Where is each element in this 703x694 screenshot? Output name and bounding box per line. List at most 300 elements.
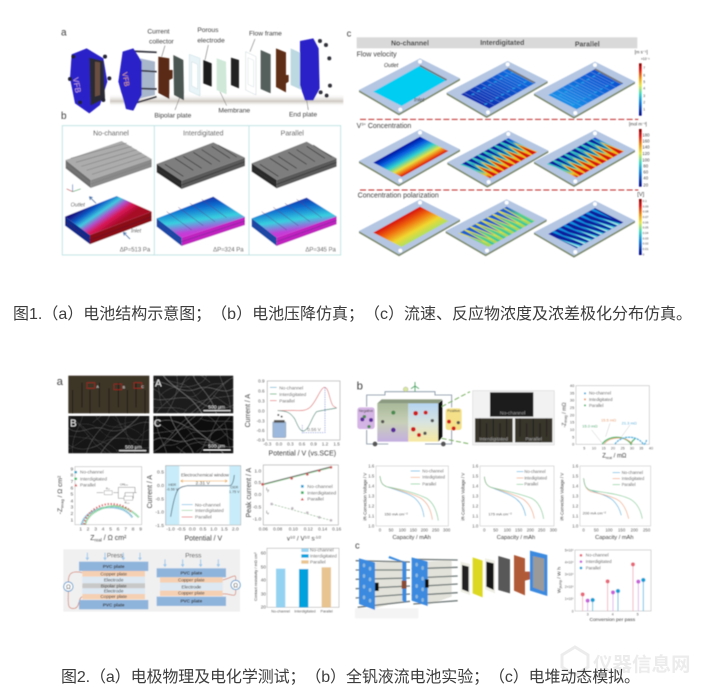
chart: discharge curves 150 mA cm-2: Intedigitated [422, 475, 446, 480]
part labels: Membrane [218, 107, 250, 114]
chart: pump work: 5 [637, 612, 639, 616]
icon: end plate with rods: VFB [120, 71, 132, 87]
chart: discharge curves 150 mA cm-2: 0 [379, 527, 382, 532]
map: flow no-channel: Inlet [414, 97, 425, 103]
icon: exploded stack parts [461, 551, 547, 597]
pressure drop values [120, 247, 337, 253]
panel b: all-vanadium flow battery tests: b [357, 380, 363, 392]
chart: contact resistivity bars: No-channel [271, 609, 290, 613]
axes triad [67, 184, 81, 192]
chart: discharge curves 175 mA cm-2 [460, 463, 558, 541]
chart: discharge curves 200 mA cm-2: 50 [594, 527, 599, 532]
chart: Nyquist full cell: real [606, 456, 612, 460]
chart: Nyquist plot: -Z [57, 508, 64, 514]
chart: electrochemical window: HER [168, 483, 177, 487]
micrograph A: A [155, 379, 162, 390]
chart: Nyquist full cell: 25 [621, 446, 625, 450]
chart: peak current: 0.08 [273, 527, 283, 532]
icon: bipolar plate [173, 55, 184, 100]
colorbar: polarization: 0 [643, 252, 645, 256]
chart: Nyquist plot: 1 [79, 527, 82, 533]
part labels: electrode [197, 37, 225, 44]
micrograph A: 500 μm [208, 404, 225, 410]
colorbar: polarization: [V] [637, 192, 645, 198]
colorbar: flow velocity [635, 49, 650, 116]
chart: discharge curves 175 mA cm-2: 1.2 [472, 503, 479, 508]
chart: Nyquist plot [57, 466, 142, 542]
chart: electrochemical window: Electrochemical window [181, 472, 230, 477]
chart: contact resistivity bars: Interdigitated [294, 609, 316, 613]
photo: electrode with marked regions [68, 376, 149, 413]
chart: electrochemical window: 0.0 [189, 527, 196, 533]
part labels: Porous [197, 27, 219, 34]
diagram: contact resistivity test stacks: Ω [233, 582, 238, 589]
chart: discharge curves 200 mA cm-2: 250 [643, 527, 651, 532]
chart: pump work: No-channel [586, 553, 609, 558]
chart: cyclic voltammetry: 0.56 V [307, 427, 322, 432]
chart: cyclic voltammetry: 0.3 [287, 441, 294, 446]
photo: electrode with marked regions: A [96, 385, 99, 389]
chart: discharge curves 200 mA cm-2: 150 [618, 527, 626, 532]
photo: electrode with marked regions: B [123, 386, 126, 390]
colorbar: polarization [637, 192, 649, 256]
chart: peak current: v [287, 536, 290, 543]
colorbar: concentration: 60 [643, 170, 649, 175]
chart: cyclic voltammetry: 0.0 [258, 408, 265, 413]
chart: Nyquist plot: 1 [71, 517, 74, 523]
chart: Nyquist full cell: -Z [562, 423, 568, 428]
chart: peak current: s [310, 536, 315, 543]
chart: peak current: 1.0 [254, 468, 262, 474]
chart: discharge curves 175 mA cm-2: Intedigitated [524, 475, 548, 480]
colorbar: concentration: 180 [642, 133, 650, 138]
column titles [93, 131, 304, 138]
chart: peak current: 0.5 [254, 480, 262, 486]
schematic: flow battery cell: Positive [447, 409, 460, 413]
row titles: Concentration polarization [358, 193, 439, 200]
chart: discharge curves 200 mA cm-2 [559, 463, 651, 541]
part labels: Flow frame [249, 31, 282, 38]
chart: discharge curves 150 mA cm-2: 1.6 [368, 463, 375, 468]
chart: pump work: Interdigitated [586, 559, 612, 564]
chart: discharge curves 175 mA cm-2: 1.6 [472, 463, 479, 468]
colorbar: flow velocity: 6 [643, 73, 645, 77]
chart: Nyquist plot: Z [90, 535, 95, 542]
figure 2: electrode, battery and stack experiments [57, 373, 653, 623]
chart: pump work: W [556, 588, 562, 593]
icon: flow frame 2 [246, 52, 256, 95]
chart: Nyquist plot: R₍ₛₜ₎ [125, 500, 130, 504]
chart: pump work: Parallel [586, 565, 601, 570]
chart: cyclic voltammetry: -0.3 [263, 441, 272, 446]
colored slab: interdigitated [157, 197, 245, 246]
icon: porous electrode [203, 60, 212, 87]
chart: discharge curves 150 mA cm-2: 1.4 [368, 483, 375, 488]
chart: pump work: / W h [556, 567, 562, 580]
icon: end plate [300, 38, 320, 100]
caption: figure 1: 图1.（a）电池结构示意图；（b）电池压降仿真；（c）流速、反应物浓度及浓差极化分布仿真。 [13, 304, 692, 323]
chart: pump work: 4×10⁵ [565, 560, 574, 564]
header bar: Interdigitated [480, 40, 524, 47]
chart: cyclic voltammetry: 0.9 [258, 379, 265, 384]
diagram: contact resistivity test stacks: PVC plate [180, 570, 203, 575]
chart: electrochemical window: -1.0 [166, 527, 175, 533]
chart: peak current: -1.0 [253, 517, 262, 523]
colorbar: polarization: 0.08 [643, 210, 649, 214]
chart: discharge curves 175 mA cm-2: 1.4 [472, 483, 479, 488]
chart: discharge curves 150 mA cm-2 [363, 463, 451, 541]
map: polarization no-channel [359, 199, 460, 256]
diagram: contact resistivity test stacks [63, 549, 240, 612]
chart: Nyquist full cell: 15.5 mΩ [601, 418, 616, 423]
icon: bolts [318, 39, 332, 98]
chart: cyclic voltammetry: Potential / V (vs.SCE) [269, 450, 336, 457]
panel c: stack dynamic simulation: c [355, 540, 360, 550]
chart: Nyquist plot: 2 [71, 511, 74, 517]
colorbar: flow velocity: 1 [643, 108, 645, 112]
chart: Nyquist full cell: 40 [649, 446, 653, 450]
pressure drop values: ΔP=324 Pa [213, 247, 244, 253]
panel b: pressure drop simulation [61, 111, 341, 255]
chart: discharge curves 200 mA cm-2: 1.4 [572, 483, 579, 488]
flow arrows and annotations [71, 197, 142, 239]
chart: Nyquist plot: 4 [102, 527, 105, 533]
diagram: contact resistivity test stacks: Press [107, 552, 123, 559]
diagram: contact resistivity test stacks: Electrode [104, 578, 124, 583]
colorbar: flow velocity: ×10⁻³ [641, 57, 650, 61]
chart: electrochemical window [147, 466, 241, 543]
icon: current collector [158, 57, 173, 99]
chart: cyclic voltammetry: Interdigitated [279, 392, 307, 397]
panel a: electrode physical and electrochemical tests: a [57, 376, 64, 388]
chart: pump work: 2×10⁵ [565, 585, 574, 589]
chart: contact resistivity bars: Contact resistivity / mΩ cm² [253, 552, 258, 601]
chart: cyclic voltammetry: -0.3 [257, 418, 265, 423]
icon: bipolar plate 2 [261, 50, 271, 93]
chart: discharge curves 200 mA cm-2: 1.6 [572, 463, 579, 468]
icon: open stack [412, 557, 458, 606]
chart: Nyquist full cell: 30 [570, 398, 575, 403]
schematic: flow battery cell [357, 382, 462, 446]
panel a: exploded battery structure: a [61, 28, 67, 39]
chart: peak current: v [267, 511, 269, 515]
chart: contact resistivity bars: 30 [261, 591, 266, 596]
diagram: contact resistivity test stacks: Bipolar plate [101, 583, 127, 588]
colorbar: polarization: 0.03 [643, 236, 649, 240]
chart: Nyquist plot: 9 [139, 527, 142, 533]
colorbar: polarization: 0.01 [643, 247, 649, 251]
pressure drop values: ΔP=513 Pa [120, 247, 151, 253]
chart: discharge curves 150 mA cm-2: 150 [410, 527, 418, 532]
part labels: Bipolar plate [154, 112, 192, 119]
chart: discharge curves 175 mA cm-2: iR-Correction Voltage / V [460, 473, 465, 520]
micrograph A [153, 373, 237, 416]
chart: Nyquist plot: 8 [132, 527, 135, 533]
chart: peak current: / V [295, 536, 305, 543]
chart: discharge curves 200 mA cm-2: 1.5 [572, 473, 579, 478]
chart: Nyquist plot: 8 [71, 473, 74, 479]
icon: flow frame [189, 54, 200, 96]
header bar: No-channel [391, 41, 429, 48]
chart: discharge curves 150 mA cm-2: 200 [421, 527, 429, 532]
chart: Nyquist full cell: Z [602, 454, 606, 460]
connector lines to photos [442, 392, 470, 444]
chart: discharge curves 175 mA cm-2: 1.1 [472, 513, 479, 518]
chart: peak current: -0.5 [253, 504, 262, 510]
chart: contact resistivity bars: 60 [261, 551, 266, 556]
diagram: contact resistivity test stacks: PVC plate [103, 564, 125, 569]
panel c: flow, concentration and polarization maps: c [347, 28, 352, 38]
chart: Nyquist full cell: Parallel [589, 403, 603, 408]
micrograph B [66, 413, 149, 456]
chart: pump work: Conversion per pass [589, 617, 636, 623]
colorbar: concentration: 40 [643, 176, 649, 181]
chart: discharge curves 200 mA cm-2: 1.2 [572, 503, 579, 508]
chart: discharge curves 200 mA cm-2: Capacity / mAh [595, 535, 633, 541]
photos: electrode flow fields: No-channel [500, 411, 525, 417]
chart: electrochemical window: 0.0 [157, 483, 164, 489]
chart: discharge curves 150 mA cm-2: 50 [389, 527, 394, 532]
colorbar: polarization: 0.06 [643, 220, 649, 224]
chart: electrochemical window: Parallel [195, 515, 212, 521]
chart: peak current: 0.14 [318, 527, 328, 532]
colorbar: polarization: 0.09 [643, 204, 649, 208]
caption: figure 2: 图2.（a）电极物理及电化学测试；（b）全钒液流电池实验；（c）电堆动态模拟。 [61, 668, 640, 686]
colorbar: concentration: 140 [642, 145, 650, 150]
colorbar: concentration: 20 [643, 182, 649, 187]
chart: Nyquist full cell: 35 [570, 390, 575, 395]
map: flow no-channel [359, 58, 460, 115]
chart: discharge curves 150 mA cm-2: 100 [399, 527, 407, 532]
watermark [562, 647, 691, 676]
chart: discharge curves 150 mA cm-2: 1.1 [368, 513, 375, 518]
chart: Nyquist full cell: 25 [570, 405, 575, 410]
row titles: V [357, 123, 361, 130]
chart: Nyquist plot: 2 [87, 527, 90, 533]
chart: Nyquist plot: Interdigitated [80, 476, 107, 481]
chart: electrochemical window: -0.56 V [166, 488, 179, 492]
chart: electrochemical window: 2.0 [232, 527, 239, 533]
chart: electrochemical window: -0.5 [155, 496, 164, 502]
diagram: contact resistivity test stacks: PVC plate [180, 599, 203, 604]
panel c: stack dynamic simulation [355, 540, 651, 623]
chart: contact resistivity bars: No-channel [310, 548, 334, 553]
chart: cyclic voltammetry [245, 379, 340, 457]
chart: electrochemical window: -0.5 [177, 527, 186, 533]
column titles: Parallel [281, 131, 304, 138]
chart: cyclic voltammetry: Parallel [279, 398, 295, 403]
chart: discharge curves 175 mA cm-2: Parallel [524, 482, 538, 487]
header bar: Parallel [575, 41, 600, 48]
colorbar: polarization: 0.1 [643, 199, 647, 203]
chart: electrochemical window: -1.5 [155, 523, 164, 529]
chart: discharge curves 150 mA cm-2: 1.2 [368, 503, 375, 508]
chart: Nyquist full cell: 30 [630, 446, 634, 450]
photos: electrode flow fields: Parallel [525, 437, 542, 443]
diagram: contact resistivity test stacks: Copper plate [100, 594, 127, 599]
colorbar: concentration: 100 [642, 157, 650, 162]
diagram: contact resistivity test stacks: Copper plate [178, 591, 205, 596]
chart: electrochemical window: 2.31 V [195, 481, 211, 487]
column titles: Interdigitated [183, 131, 224, 138]
chart: Nyquist plot: No-channel [80, 470, 104, 475]
micrograph C [150, 413, 233, 456]
icon: transparent plate [291, 48, 302, 90]
chart: electrochemical window: 1.5 [221, 527, 228, 533]
chart: discharge curves 175 mA cm-2: 1.0 [472, 523, 479, 528]
colorbar: concentration: 120 [642, 151, 650, 156]
icon: assembled stack [355, 556, 418, 618]
part labels: collector [149, 39, 175, 46]
chart: Nyquist plot: 3 [94, 527, 97, 533]
chart: pump work: pump [558, 580, 562, 588]
map: polarization parallel [534, 201, 635, 258]
map: V3+ no-channel [359, 129, 460, 186]
chart: Nyquist plot: 9 [71, 466, 74, 472]
colorbar: polarization: 0.05 [643, 226, 649, 230]
chart: pump work: 1×10⁵ [565, 597, 574, 601]
chart: contact resistivity bars: 50 [261, 564, 266, 569]
chart: discharge curves 200 mA cm-2: 1.3 [572, 493, 579, 498]
chart: peak current [246, 465, 342, 543]
map: polarization interdigitated [446, 199, 547, 256]
colorbar: polarization: 0.04 [643, 231, 649, 235]
chart: Nyquist plot: Rₛₑ [106, 486, 110, 490]
chart: contact resistivity bars: 40 [261, 578, 266, 583]
diagram: contact resistivity test stacks: Copper plate [100, 571, 127, 576]
colored slab: parallel [252, 198, 337, 246]
chart: peak current: No-channel [307, 484, 333, 490]
panel a: exploded battery structure [61, 27, 343, 119]
photos: electrode flow fields: Interdigitated [479, 437, 508, 443]
chart: Nyquist full cell: 40 [570, 383, 575, 388]
chart: Nyquist plot: 6 [117, 527, 120, 533]
chart: electrochemical window: Potential / V [184, 536, 222, 543]
chart: electrochemical window: -1.0 [155, 510, 164, 516]
chart: Nyquist full cell: 20 [570, 412, 575, 417]
chart: Nyquist full cell: 5 [572, 434, 575, 439]
chart: contact resistivity bars: Parallel [310, 560, 326, 565]
chart: peak current: Parallel [307, 497, 324, 503]
chart: pump work: 0 [572, 609, 574, 613]
chart: discharge curves 150 mA cm-2: No-channel [422, 468, 444, 473]
chart: discharge curves 200 mA cm-2: 200 [631, 527, 639, 532]
map: V3+ interdigitated [447, 131, 548, 188]
chart: contact resistivity bars: Parallel [321, 609, 333, 613]
chart: pump work [556, 548, 651, 623]
column titles: No-channel [93, 131, 129, 138]
chart: Nyquist full cell: 15 [570, 420, 575, 425]
part labels: End plate [289, 112, 317, 119]
chart: Nyquist plot: CPE₍ₑₗ₎ [120, 482, 129, 486]
chart: Nyquist full cell: 35 [639, 446, 643, 450]
chart: Nyquist plot: 5 [109, 527, 112, 533]
chart: discharge curves 150 mA cm-2: Capacity / mAh [392, 535, 431, 541]
chart: cyclic voltammetry: 0.6 [258, 389, 265, 394]
pressure drop values: ΔP=345 Pa [305, 247, 337, 253]
chart: peak current: 0.06 [259, 527, 268, 532]
chart: Nyquist full cell: / mΩ [562, 402, 568, 415]
map: flow interdigitated [447, 61, 548, 118]
photo: electrode with marked regions: C [141, 385, 144, 389]
chart: Nyquist full cell: 15.0 mΩ [582, 423, 597, 428]
colorbar: flow velocity: [m s⁻¹] [635, 49, 648, 54]
chart: electrochemical window: No-channel [195, 502, 220, 508]
diagram: contact resistivity test stacks: Electrode [104, 589, 124, 594]
chart: discharge curves 200 mA cm-2: 1.0 [572, 523, 579, 528]
micrograph C: 500 μm [208, 443, 225, 449]
chart: Nyquist plot: Parallel [80, 483, 96, 488]
colorbar: flow velocity: 5 [643, 80, 645, 84]
schematic: flow battery cell: Negative [359, 409, 373, 413]
chart: cyclic voltammetry: 0.9 [310, 441, 317, 446]
chart: discharge curves 150 mA cm-2: 150 mA cm⁻² [384, 512, 408, 517]
colorbar: concentration [629, 122, 650, 187]
chart: peak current: Peak current / A [246, 467, 253, 518]
chart: discharge curves 175 mA cm-2: 175 mA cm⁻² [488, 512, 512, 517]
chart: discharge curves 175 mA cm-2: 200 [527, 527, 535, 532]
chart: Nyquist full cell: imag [564, 415, 568, 423]
chart: cyclic voltammetry: -0.6 [257, 428, 265, 433]
chart: electrochemical window: 0.5 [157, 470, 164, 476]
chart: discharge curves 175 mA cm-2: 1.3 [472, 493, 479, 498]
chart: Nyquist plot: / Ω cm² [57, 475, 64, 499]
photos: electrode flow fields [473, 391, 554, 445]
chart: peak current: p [267, 489, 269, 493]
diagram: contact resistivity test stacks: Electrode [181, 584, 202, 589]
row titles: Concentration [366, 123, 411, 130]
icon: end plate with rods [118, 48, 157, 111]
chart: discharge curves 175 mA cm-2: Capacity / mAh [497, 535, 535, 541]
icon: membrane [217, 58, 227, 94]
panel a: electrode physical and electrochemical tests [57, 373, 342, 613]
chart: Nyquist full cell: 15 [602, 446, 606, 450]
chart: Nyquist full cell: 21.3 mΩ [622, 420, 637, 425]
colorbar: concentration: 160 [642, 139, 650, 144]
map: flow no-channel: Outlet [384, 63, 399, 69]
chart: discharge curves 175 mA cm-2: 150 [515, 527, 523, 532]
chart: discharge curves 200 mA cm-2: 0 [582, 527, 585, 532]
icon: assembled battery [68, 48, 111, 113]
flow arrows and annotations: Outlet [71, 202, 85, 208]
colorbar: concentration: 80 [643, 164, 649, 169]
chart: peak current: 1/2 [290, 536, 295, 540]
chart: Nyquist plot: 4 [71, 498, 74, 504]
map: V3+ parallel [534, 130, 635, 187]
chart: cyclic voltammetry: No-channel [279, 385, 303, 390]
colorbar: polarization: 0.07 [643, 215, 649, 219]
micrograph B: 500 μm [125, 445, 142, 451]
chart: cyclic voltammetry: 1.2 [322, 441, 329, 446]
part labels [147, 27, 317, 119]
chart: discharge curves 150 mA cm-2: 250 [432, 527, 440, 532]
panel b: all-vanadium flow battery tests [357, 380, 653, 541]
chart: discharge curves 175 mA cm-2: 50 [493, 527, 499, 532]
chart: discharge curves 150 mA cm-2: 1.3 [368, 493, 375, 498]
chart: pump work: 3×10⁵ [565, 573, 574, 577]
chart: pump work: 5×10⁵ [565, 548, 574, 552]
chart: peak current: I [266, 509, 267, 514]
gray slab: parallel [252, 142, 337, 188]
chart: electrochemical window: Interdigitated [195, 508, 224, 514]
chart: pump work: 4 [612, 612, 614, 616]
chart: discharge curves 200 mA cm-2: iR-Correction Voltage / V [559, 473, 564, 520]
chart: pump work: 3 [587, 612, 589, 616]
chart: discharge curves 200 mA cm-2: 1.1 [572, 513, 579, 518]
chart: discharge curves 150 mA cm-2: iR-Correction Voltage / V [363, 473, 368, 520]
row titles: 3+ [361, 121, 367, 126]
chart: discharge curves 150 mA cm-2: 1.0 [368, 523, 375, 528]
